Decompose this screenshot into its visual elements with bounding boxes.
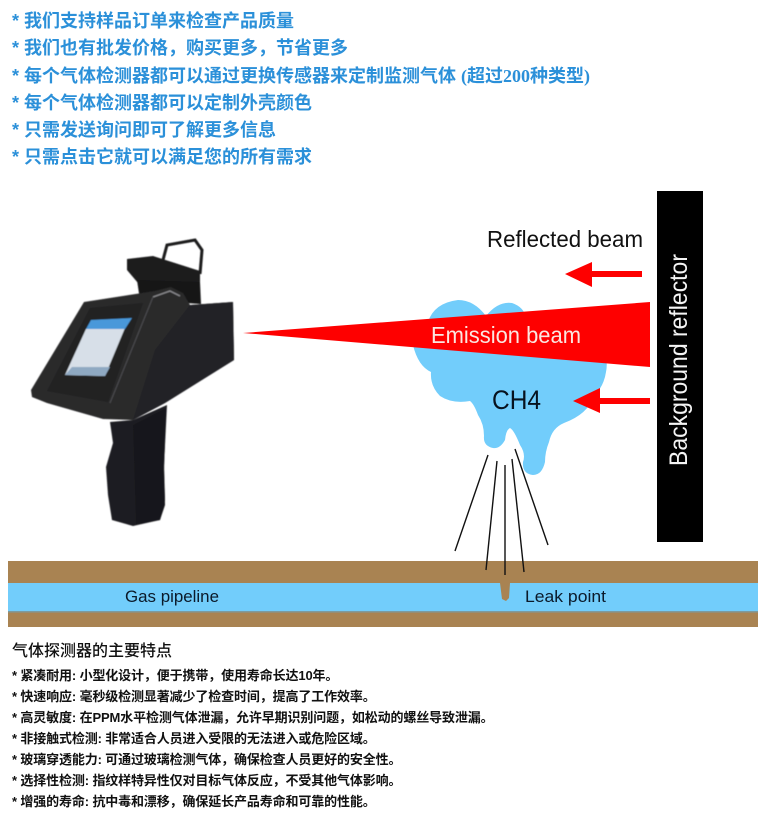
label: reflected beam: Reflected beam [487,226,643,252]
promo line 6: * 只需点击它就可以满足您的所有需求 [12,147,312,167]
features section [12,642,493,809]
ground and pipeline [8,561,758,627]
promo line 2: * 我们也有批发价格，购买更多，节省更多 [12,38,348,58]
icon: handheld gas detector [31,240,234,526]
label: emission beam: Emission beam [431,322,581,348]
feature 4: * 非接触式检测: 非常适合人员进入受限的无法进入或危险区域。 [12,731,376,746]
promo line 3: * 每个气体检测器都可以通过更换传感器来定制监测气体 (超过200种类型) [12,66,590,86]
promo line 1: * 我们支持样品订单来检查产品质量 [12,11,294,31]
emission beam [243,302,650,367]
feature 6: * 选择性检测: 指纹样特异性仅对目标气体反应，不受其他气体影响。 [12,773,401,788]
feature 3: * 高灵敏度: 在PPM水平检测气体泄漏，允许早期识别问题，如松动的螺丝导致泄漏。 [12,710,493,725]
background reflector [657,191,703,542]
features heading: 气体探测器的主要特点 [12,643,172,660]
promo line 5: * 只需发送询问即可了解更多信息 [12,120,276,140]
feature 5: * 玻璃穿透能力: 可通过玻璃检测气体，确保检查人员更好的安全性。 [12,752,401,767]
feature 2: * 快速响应: 毫秒级检测显著减少了检查时间，提高了工作效率。 [12,689,376,704]
feature 7: * 增强的寿命: 抗中毒和漂移，确保延长产品寿命和可靠的性能。 [12,794,376,809]
gas cloud [413,300,607,475]
label: background reflector: Background reflector [665,254,693,466]
gas detection diagram [8,191,758,627]
promo line 4: * 每个气体检测器都可以定制外壳颜色 [12,93,312,113]
leak point crack [500,583,510,601]
label: CH4: CH4 [492,385,541,415]
arrow: reflected beam lower [573,388,650,413]
label: gas pipeline: Gas pipeline [125,587,219,606]
arrow: reflected beam upper [565,262,642,287]
gas leak lines [455,449,548,575]
feature 1: * 紧凑耐用: 小型化设计，便于携带，使用寿命长达10年。 [12,668,338,683]
promo list [12,11,590,167]
label: leak point: Leak point [525,587,606,606]
